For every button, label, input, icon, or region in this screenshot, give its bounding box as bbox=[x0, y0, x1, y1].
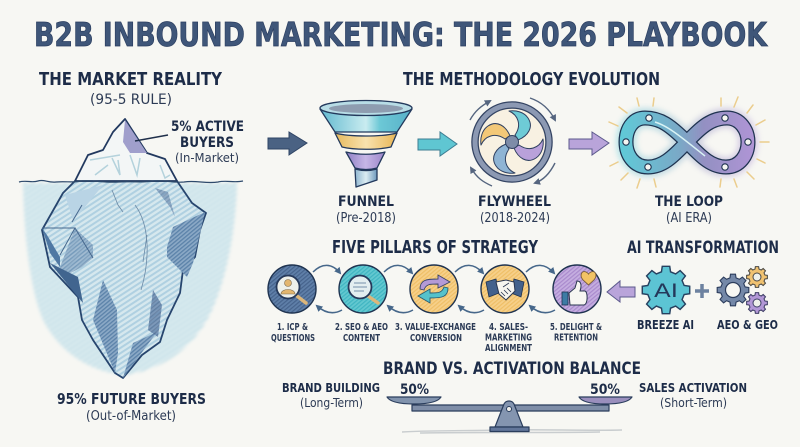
waterline bbox=[19, 180, 243, 183]
scale right pan bbox=[579, 397, 632, 404]
label: sales activation: SALES ACTIVATION bbox=[639, 381, 747, 395]
iceberg tip bbox=[75, 119, 177, 181]
tip shading bbox=[90, 155, 170, 178]
loop nodes bbox=[623, 115, 751, 170]
scale ground shadow bbox=[402, 430, 622, 433]
value: brand 50%: 50% bbox=[400, 382, 429, 398]
label: flywheel bbox=[478, 194, 551, 226]
icon: Breeze AI gear: AI bbox=[654, 280, 678, 302]
icon: iceberg bbox=[42, 119, 206, 378]
heading: five pillars: FIVE PILLARS OF STRATEGY bbox=[332, 238, 538, 258]
flywheel blades bbox=[481, 111, 543, 173]
pillar 2: SEO and AEO content: CONTENT bbox=[343, 333, 380, 344]
panel: market reality bbox=[19, 69, 244, 424]
pillar 3: value-exchange conversion: CONVERSION bbox=[410, 333, 462, 344]
label: AEO and GEO: AEO & GEO bbox=[717, 318, 778, 332]
pillar 5: delight and retention: RETENTION bbox=[554, 332, 598, 344]
pillar 1: ICP and questions bbox=[268, 265, 316, 344]
pillar 4: sales-marketing alignment: 4. SALES- bbox=[489, 322, 528, 333]
pillar 4: sales-marketing alignment bbox=[481, 265, 532, 354]
icon: funnel bbox=[320, 100, 412, 187]
label: the loop: THE LOOP bbox=[655, 194, 723, 210]
pillar connector arrows bbox=[313, 265, 555, 313]
label: funnel: (Pre-2018) bbox=[336, 211, 396, 226]
label: flywheel: (2018-2024) bbox=[480, 211, 550, 226]
active buyers facet bbox=[123, 120, 147, 153]
label: 95% future buyers bbox=[57, 390, 206, 424]
label: Breeze AI: BREEZE AI bbox=[637, 318, 694, 332]
label: 95% future buyers: (Out-of-Market) bbox=[86, 409, 176, 424]
callout pointer bbox=[135, 135, 168, 141]
panel: methodology evolution bbox=[320, 69, 769, 226]
panel: five pillars bbox=[268, 238, 602, 354]
pillar 2: SEO and AEO content: 2. SEO & AEO bbox=[335, 322, 388, 333]
label: flywheel: FLYWHEEL bbox=[478, 194, 551, 210]
label: funnel bbox=[336, 194, 396, 226]
icon: flywheel bbox=[470, 98, 555, 186]
label: the loop bbox=[655, 194, 723, 226]
flywheel hub bbox=[506, 136, 518, 148]
icon: Breeze AI gear bbox=[642, 266, 690, 314]
subheading: 95-5 rule: (95-5 RULE) bbox=[90, 92, 172, 108]
arrow: funnel to flywheel bbox=[418, 132, 457, 156]
callout: 5% active buyers: 5% ACTIVE bbox=[171, 119, 244, 135]
scale left pan bbox=[387, 397, 441, 404]
label: brand building: (Long-Term) bbox=[300, 396, 363, 410]
pillar 5: delight and retention: 5. DELIGHT & bbox=[550, 322, 602, 333]
arrow: flywheel to loop bbox=[569, 132, 609, 155]
scale fulcrum bbox=[495, 401, 523, 427]
water hatching bbox=[23, 183, 237, 375]
iceberg underwater mass bbox=[42, 181, 206, 378]
icon: infinity loop bbox=[609, 97, 769, 188]
icon: AEO and GEO gears bbox=[717, 267, 767, 313]
pillar 1: ICP and questions: 1. ICP & bbox=[277, 322, 308, 333]
label: the loop: (AI ERA) bbox=[666, 211, 712, 226]
pillar 2: SEO and AEO content bbox=[335, 265, 388, 344]
label: funnel: FUNNEL bbox=[338, 194, 394, 210]
heading: methodology evolution: THE METHODOLOGY EVOLUTION bbox=[403, 69, 660, 90]
scale base bbox=[490, 427, 529, 432]
icon: plus bbox=[695, 284, 709, 298]
loop glow bbox=[626, 118, 748, 167]
arrow: market to methodology bbox=[268, 132, 307, 155]
label: brand building: BRAND BUILDING bbox=[282, 381, 380, 395]
callout: 5% active buyers bbox=[171, 119, 244, 165]
heading: the market reality: THE MARKET REALITY bbox=[39, 69, 222, 90]
rotation arrows bbox=[470, 98, 555, 186]
panel: brand vs activation balance bbox=[282, 359, 747, 433]
panel: AI transformation bbox=[607, 238, 779, 332]
callout: 5% active buyers: BUYERS bbox=[180, 135, 234, 151]
value: activation 50%: 50% bbox=[590, 382, 620, 398]
pillar 4: sales-marketing alignment: ALIGNMENT bbox=[485, 343, 532, 354]
pillar 3: value-exchange conversion: 3. VALUE-EXCHANGE bbox=[395, 322, 476, 333]
pillar 4: sales-marketing alignment: MARKETING bbox=[485, 332, 532, 344]
loop rays bbox=[609, 97, 769, 188]
label: 95% future buyers: 95% FUTURE BUYERS bbox=[57, 390, 206, 408]
flywheel ring bbox=[475, 105, 549, 179]
icon: balance scale bbox=[387, 397, 632, 433]
iceberg facets bbox=[42, 185, 205, 378]
scale beam bbox=[412, 405, 609, 411]
pillar 1: ICP and questions: QUESTIONS bbox=[271, 333, 315, 344]
pillar 5: delight and retention bbox=[550, 265, 602, 344]
label: brand building bbox=[282, 381, 380, 410]
callout: 5% active buyers: (In-Market) bbox=[175, 151, 239, 165]
pillar 3: value-exchange conversion bbox=[395, 265, 476, 344]
label: sales activation: (Short-Term) bbox=[660, 396, 727, 410]
heading: brand vs activation: BRAND VS. ACTIVATION BALANCE bbox=[383, 359, 641, 379]
loop band bbox=[626, 118, 748, 167]
arrow: AI into pillars bbox=[607, 281, 635, 302]
label: sales activation bbox=[639, 381, 747, 410]
